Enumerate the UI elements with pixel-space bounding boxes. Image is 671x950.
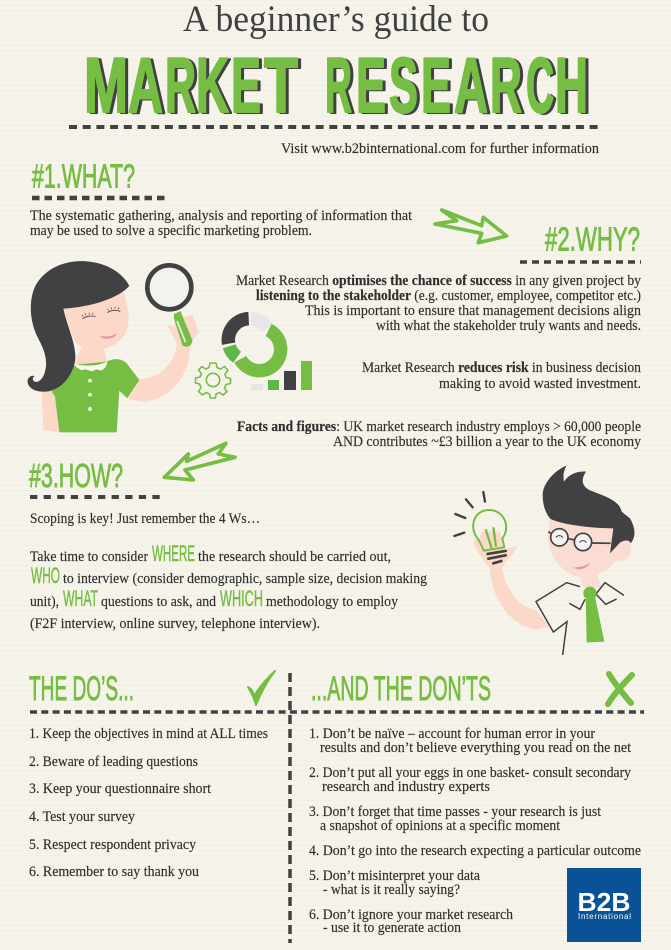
- website link text: Visit www.b2binternational.com for further information: [281, 141, 599, 157]
- main title: market research: C: [526, 41, 554, 129]
- text: facts and figures: Facts and figures: UK market research industry employs > 60,000 people: [237, 419, 641, 435]
- text: why paragraph 1: [236, 273, 641, 334]
- main title: market research: A: [131, 42, 166, 130]
- text: four Ws paragraph: to interview (consider demographic, sample size, decision making: [63, 571, 427, 587]
- main title: market research: E: [424, 42, 454, 130]
- icon: check mark: [248, 671, 275, 705]
- main title: market research: M: [87, 42, 131, 130]
- heading: the do's: THE DO’S...: [29, 670, 134, 708]
- main title: market research: M: [84, 41, 128, 129]
- main title: market research: A: [457, 42, 491, 130]
- list: don'ts: [309, 726, 641, 936]
- heading: #3 how: #3.HOW?: [29, 457, 123, 494]
- main title: market research: R: [165, 41, 196, 129]
- list: don'ts: 6. Don’t ignore your market research: [309, 907, 513, 923]
- list: don'ts: 5. Don’t misinterpret your data: [309, 868, 480, 884]
- text: scoping: Scoping is key! Just remember the 4 Ws…: [30, 511, 260, 527]
- icon: girl with magnifying glass: [28, 261, 199, 433]
- main title: market research: T: [267, 42, 301, 130]
- main title: market research: R: [493, 42, 525, 130]
- text: why paragraph 1: Market Research optimises the chance of success in any given project by: [236, 273, 641, 289]
- main title: market research: S: [389, 41, 418, 129]
- main title: market research: S: [392, 42, 421, 130]
- logo: B2B International: B2B: [578, 887, 630, 917]
- main title: market research: E: [359, 42, 389, 130]
- main title: market research: [84, 41, 591, 130]
- text: four Ws paragraph: unit),: [30, 594, 59, 610]
- main title: market research: E: [421, 41, 451, 129]
- text: what definition: [30, 208, 413, 239]
- text: why paragraph 1: listening to the stakeholder (e.g. customer, employee, competitor etc.): [256, 288, 641, 304]
- list: don'ts: - what is it really saying?: [323, 882, 460, 898]
- text: why paragraph 1: This is important to ensure that management decisions align: [305, 303, 641, 319]
- text: why paragraph 2: [362, 360, 641, 392]
- text: four Ws paragraph: methodology to employ: [266, 594, 398, 610]
- logo: B2B International: [567, 868, 641, 942]
- title: [84, 0, 591, 130]
- list: don'ts: 2. Don’t put all your eggs in one basket- consult secondary: [309, 765, 631, 781]
- panel: the don'ts: [309, 670, 641, 936]
- icon: gear: [196, 363, 230, 398]
- text: why paragraph 1: with what the stakeholder truly wants and needs.: [376, 318, 641, 334]
- chart: bars: [251, 361, 312, 390]
- list: do's: 3. Keep your questionnaire short: [29, 781, 212, 797]
- main title: market research: H: [558, 42, 591, 130]
- panel: why: [236, 220, 641, 450]
- main title: market research: R: [168, 42, 199, 130]
- list: don'ts: results and don’t believe everything you read on the net: [320, 740, 632, 756]
- main title: market research: T: [264, 41, 298, 129]
- arrow: to why: [435, 210, 507, 243]
- list: don'ts: 3. Don’t forget that time passes - your research is just: [309, 804, 602, 820]
- heading: the don'ts: ...AND THE DON’TS: [311, 670, 491, 708]
- text: four Ws paragraph: WHERE: [152, 541, 195, 566]
- list: do's: 4. Test your survey: [29, 809, 135, 825]
- arrow: to how: [164, 443, 235, 480]
- main title: market research: R: [325, 41, 352, 129]
- text: why paragraph 2: making to avoid wasted investment.: [439, 376, 641, 392]
- list: don'ts: 4. Don’t go into the research expecting a particular outcome: [309, 843, 641, 859]
- list: don'ts: - use it to generate action: [323, 920, 461, 936]
- text: facts and figures: [237, 419, 641, 450]
- heading: #1 what: #1.WHAT?: [32, 158, 135, 194]
- text: why paragraph 2: Market Research reduces risk in business decision: [362, 360, 641, 376]
- main title: market research: C: [529, 42, 557, 130]
- icon: man with light bulb: [454, 466, 634, 655]
- main title: market research: E: [356, 41, 386, 129]
- text: four Ws paragraph: Take time to consider: [30, 549, 148, 565]
- text: what definition: may be used to solve a specific marketing problem.: [30, 223, 312, 239]
- main title: market research: E: [231, 41, 261, 129]
- text: four Ws paragraph: WHICH: [220, 586, 263, 611]
- main title: market research: R: [490, 41, 522, 129]
- text: what definition: The systematic gathering, analysis and reporting of information that: [30, 208, 413, 224]
- main title: market research: R: [328, 42, 355, 130]
- panel: how: [29, 457, 427, 632]
- main title: market research: K: [196, 41, 229, 129]
- logo: B2B International: International: [578, 912, 631, 921]
- main title: market research: E: [234, 42, 264, 130]
- list: do's: 2. Beware of leading questions: [29, 754, 198, 770]
- list: don'ts: 1. Don’t be naïve – account for human error in your: [309, 726, 595, 742]
- list: do's: 5. Respect respondent privacy: [29, 837, 196, 853]
- list: do's: 1. Keep the objectives in mind at ALL times: [29, 726, 268, 742]
- main title: market research: H: [555, 41, 588, 129]
- icon: cross: [608, 674, 632, 704]
- list: do's: [29, 726, 268, 880]
- panel: what: [30, 158, 413, 239]
- list: do's: 6. Remember to say thank you: [29, 864, 199, 880]
- subtitle: a beginner's guide to: A beginner’s guide to: [183, 0, 489, 40]
- text: facts and figures: AND contributes ~£3 billion a year to the UK economy: [333, 434, 641, 450]
- list: don'ts: a snapshot of opinions at a specific moment: [320, 818, 561, 834]
- main title: market research: A: [454, 41, 488, 129]
- text: four Ws paragraph: questions to ask, and: [101, 594, 216, 610]
- text: four Ws paragraph: WHAT: [63, 586, 98, 611]
- text: four Ws paragraph: [30, 541, 427, 632]
- text: four Ws paragraph: the research should be carried out,: [198, 549, 391, 565]
- main title: market research: K: [199, 42, 232, 130]
- text: four Ws paragraph: WHO: [31, 563, 60, 588]
- text: four Ws paragraph: (F2F interview, online survey, telephone interview).: [30, 616, 320, 632]
- chart: donut: [228, 319, 281, 371]
- main title: market research: A: [128, 41, 163, 129]
- list: don'ts: research and industry experts: [322, 779, 490, 795]
- panel: the do's: [29, 670, 275, 880]
